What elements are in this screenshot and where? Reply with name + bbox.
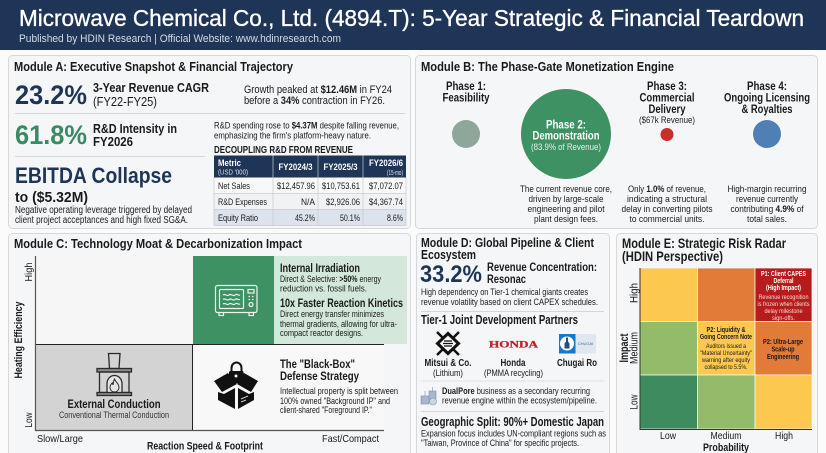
heading: Module E — [622, 235, 786, 264]
table: decoupling R&D from revenue: $2,926.06 — [326, 197, 360, 208]
x axis labels — [37, 433, 379, 452]
phase 2: The current revenue core, — [520, 184, 612, 195]
stat: revenue CAGR: 23.2% — [15, 80, 87, 110]
risk: liquidity and going concern — [700, 327, 753, 371]
quadrant: black-box strategy: 100% owned "Background IP" and — [280, 396, 390, 406]
table: decoupling R&D from revenue — [214, 156, 406, 226]
text: R&D note — [214, 120, 399, 142]
phase 1: Feasibility — [442, 92, 490, 104]
risk: ultra-large scale-up: Scale-up — [772, 344, 795, 354]
quadrant: internal irradiation: thermal gradients, allowing for ultra- — [280, 319, 397, 329]
phase 2: driven by large-scale — [528, 194, 604, 205]
text: growth note: before a 34% contraction in FY26. — [244, 95, 385, 107]
phase 4: Ongoing Licensing — [724, 92, 810, 104]
panel: Module E — [616, 234, 818, 453]
phase 3: indicating a structural — [627, 194, 707, 205]
quadrant: internal irradiation: Direct energy transfer minimizes — [280, 309, 384, 319]
phase 3: ($67k Revenue) — [639, 115, 695, 126]
phase 2: Phase 2: — [546, 120, 586, 132]
table: decoupling R&D from revenue: Equity Ratio — [218, 213, 258, 224]
stat: revenue concentration: Resonac — [487, 274, 526, 286]
risk matrix — [640, 268, 812, 430]
y axis labels — [13, 262, 35, 428]
stat: EBITDA collapse: Negative operating leverage triggered by delayed — [15, 205, 192, 216]
table: decoupling R&D from revenue: (USD '000) — [218, 170, 248, 176]
impact axis labels: High — [628, 283, 640, 303]
risk: liquidity and going concern: Auditors issued a — [706, 343, 746, 350]
partner: Honda — [484, 340, 543, 379]
stat: revenue CAGR: 3-Year Revenue CAGR — [93, 80, 210, 95]
impact axis labels — [619, 283, 640, 410]
phase 2 — [520, 89, 612, 225]
x axis labels: Slow/Large — [37, 433, 83, 445]
panel: Module D — [416, 234, 610, 453]
geographic split: Geographic Split: 90%+ Domestic Japan — [421, 415, 604, 429]
risk: ultra-large scale-up: Engineering — [767, 352, 799, 361]
stat: revenue concentration: revenue volatility based on client CAPEX schedules. — [421, 297, 598, 308]
stat: R&D intensity: 61.8% — [15, 120, 87, 150]
phase 3 — [622, 81, 713, 225]
heading: Module B: Module B: The Phase-Gate Monetization Engine — [421, 59, 674, 74]
geographic split — [421, 415, 606, 449]
probability axis labels: Low — [660, 430, 676, 442]
risk: client CAPEX deferral: sign-offs. — [772, 315, 795, 322]
geographic split: Expansion focus includes UN-compliant regions such as — [421, 428, 606, 440]
table: decoupling R&D from revenue: 8.6% — [387, 213, 403, 224]
risk: client CAPEX deferral: Revenue recognition — [758, 294, 809, 301]
quadrant: internal irradiation: Direct & Selective: >50% energy — [280, 274, 381, 284]
text: R&D note: emphasizing the firm's platform-heavy nature. — [214, 130, 371, 142]
phase 2: plant design fees. — [534, 214, 598, 225]
risk: client CAPEX deferral: delay milestone — [764, 308, 803, 315]
table: decoupling R&D from revenue: $4,367.74 — [369, 197, 403, 208]
panel: Module C — [8, 234, 410, 453]
risk: liquidity and going concern: P2: Liquidity & — [706, 327, 746, 334]
heading: Module D — [421, 235, 595, 262]
probability axis labels — [660, 430, 793, 453]
risk: liquidity and going concern: "Material Uncertainty" — [700, 350, 753, 357]
partner: Honda: HONDA — [489, 340, 538, 350]
quadrant: external conduction: Conventional Thermal Conduction — [59, 410, 169, 420]
risk: ultra-large scale-up — [763, 337, 803, 361]
phase 4: revenue currently — [736, 194, 798, 205]
stat: EBITDA collapse: client project acceptances and high fixed SG&A. — [15, 215, 188, 226]
icon: lab equipment — [421, 387, 436, 405]
phase 2: Demonstration — [532, 130, 600, 142]
quadrant: internal irradiation: reduction vs. fossil fuels. — [280, 284, 367, 294]
quadrant: internal irradiation: Internal Irradiation — [280, 261, 360, 275]
phase 2: (83.9% of Revenue) — [531, 142, 601, 153]
table: decoupling R&D from revenue: R&D Expenses — [218, 197, 267, 208]
impact axis labels: Low — [628, 394, 640, 410]
stat: R&D intensity: R&D Intensity in — [93, 121, 177, 136]
stat: revenue concentration: Revenue Concentration: — [487, 262, 597, 274]
x axis labels: Reaction Speed & Footprint — [147, 440, 263, 452]
text: growth note — [244, 84, 392, 107]
stat: R&D intensity — [15, 120, 177, 150]
phase 2: engineering and pilot — [528, 204, 605, 215]
quadrant: internal irradiation — [193, 256, 407, 344]
table: decoupling R&D from revenue: $10,753.61 — [322, 181, 360, 192]
geographic split: "Taiwan, Province of China" for specific projects. — [421, 438, 579, 449]
probability axis labels: Medium — [710, 430, 742, 442]
table: decoupling R&D from revenue: Metric — [218, 158, 241, 168]
note: DualPore: revenue engine within the ecosystem/pipeline. — [442, 396, 597, 406]
panel: Module A — [8, 56, 410, 228]
icon: Mitsui mark — [437, 332, 459, 355]
risk: liquidity and going concern: Going Concern Note — [700, 334, 752, 341]
y axis labels: Heating Efficiency — [13, 301, 25, 378]
phase 4: contributing 4.9% of — [730, 204, 804, 215]
quadrant: black-box strategy — [214, 357, 398, 415]
x axis labels: Fast/Compact — [322, 433, 379, 445]
phase 3: delay in converting pilots — [622, 204, 713, 215]
table: decoupling R&D from revenue: FY2025/3 — [324, 162, 358, 172]
table: decoupling R&D from revenue: $7,072.07 — [369, 181, 403, 192]
risk: client CAPEX deferral: Deferral — [774, 278, 794, 285]
icon: locked box — [214, 362, 258, 409]
stat: revenue concentration: High dependency on Tier-1 chemical giants creates — [421, 287, 588, 298]
table: decoupling R&D from revenue: FY2024/3 — [278, 162, 312, 172]
icon: fireplace — [97, 354, 132, 396]
text: R&D note: R&D spending rose to $4.37M despite falling revenue, — [214, 120, 399, 132]
heading: Module D: Ecosystem — [421, 247, 476, 262]
quadrant: black-box strategy: client-shared "Foreground IP." — [280, 405, 372, 415]
quadrant: internal irradiation: compact reactor designs. — [280, 328, 363, 338]
phase 3: to commercial units. — [630, 214, 704, 225]
risk: liquidity and going concern: warning after equity — [701, 357, 751, 364]
table: decoupling R&D from revenue: (15-mo) — [387, 170, 403, 177]
phase 4 — [724, 81, 810, 225]
quadrant: external conduction: External Conduction — [68, 397, 160, 411]
y axis labels: High — [23, 262, 35, 282]
phase 4: & Royalties — [742, 104, 792, 116]
table: decoupling R&D from revenue: FY2026/6 — [369, 158, 403, 168]
risk: liquidity and going concern: collapsed to 5.5%. — [704, 364, 748, 371]
partner: Honda: (PMMA recycling) — [484, 368, 543, 379]
quadrant chart — [36, 256, 407, 430]
partner: Chugai Ro — [557, 334, 597, 369]
risk: client CAPEX deferral: P1: Client CAPES — [761, 271, 806, 278]
phase 4: High-margin recurring — [728, 184, 806, 195]
heading: Module E: (HDIN Perspective) — [622, 248, 723, 264]
risk: client CAPEX deferral — [758, 271, 810, 322]
note: DualPore: DualPore business as a secondary recurring — [442, 386, 590, 397]
table: decoupling R&D from revenue: 50.1% — [340, 213, 360, 224]
title: Microwave Chemical Co., Ltd. (4894.T): 5-Year Strategic & Financial Teardown — [19, 5, 804, 31]
subtitle: Published by HDIN Research | Official Website: www.hdinresearch.com — [19, 33, 341, 45]
phase 1: Phase 1: — [446, 81, 486, 93]
header banner — [0, 0, 826, 50]
risk: client CAPEX deferral: (High Impact) — [766, 285, 801, 292]
stat: revenue concentration: 33.2% — [420, 261, 482, 288]
risk: ultra-large scale-up: P2: Ultra-Large — [763, 337, 803, 346]
stat: revenue CAGR: (FY22-FY25) — [93, 94, 157, 109]
heading: Module E: Module E: Strategic Risk Radar — [622, 235, 786, 251]
phase 3: Only 1.0% of revenue, — [628, 184, 706, 195]
icon: Chugai logo: CHUGAI — [578, 341, 593, 346]
partners heading: Tier-1 Joint Development Partners — [421, 313, 578, 327]
quadrant: black-box strategy: The "Black-Box" — [280, 357, 355, 371]
phase 4: total sales. — [747, 214, 787, 225]
note: DualPore — [421, 386, 597, 406]
table: decoupling R&D from revenue: N/A — [301, 197, 316, 208]
table heading: DECOUPLING R&D FROM REVENUE — [214, 144, 353, 156]
text: growth note: Growth peaked at $12.46M in FY24 — [244, 84, 392, 96]
table: decoupling R&D from revenue: $12,457.96 — [277, 181, 315, 192]
phase 4: Phase 4: — [747, 81, 787, 93]
impact axis labels: Medium — [628, 332, 640, 364]
phase 3: Commercial — [640, 92, 694, 104]
risk: client CAPEX deferral: is frozen when clients — [758, 301, 810, 308]
heading: Module D: Module D: Global Pipeline & Client — [421, 235, 595, 250]
partner: Mitsui: Mitsui & Co. — [424, 357, 472, 369]
partner: Honda: Honda — [500, 357, 526, 369]
partner: Mitsui: (Lithium) — [433, 368, 463, 379]
stat: EBITDA collapse — [15, 163, 192, 226]
stat: revenue CAGR — [15, 80, 210, 110]
quadrant: black-box strategy: Defense Strategy — [280, 369, 359, 383]
phase 3: Delivery — [648, 104, 686, 116]
phase 3: Phase 3: — [647, 81, 687, 93]
partner: Chugai Ro: Chugai Ro — [557, 357, 597, 369]
stat: EBITDA collapse: to ($5.32M) — [15, 190, 88, 206]
probability axis labels: High — [775, 430, 793, 442]
stat: revenue concentration — [420, 261, 598, 308]
impact axis labels: Impact — [619, 333, 631, 362]
quadrant: internal irradiation: 10x Faster Reaction Kinetics — [280, 296, 403, 310]
phase 1 — [442, 81, 490, 148]
quadrant: external conduction — [36, 345, 192, 430]
quadrant: black-box strategy: Intellectual property is split between — [280, 386, 398, 396]
heading: Module A: Module A: Executive Snapshot & Financial Trajectory — [14, 59, 294, 74]
heading: Module C: Module C: Technology Moat & Decarbonization Impact — [14, 236, 303, 251]
stat: EBITDA collapse: EBITDA Collapse — [15, 163, 172, 188]
stat: R&D intensity: FY2026 — [93, 134, 133, 149]
y axis labels: Low — [23, 412, 35, 428]
partner: Mitsui — [424, 332, 472, 379]
table: decoupling R&D from revenue: 45.2% — [295, 213, 315, 224]
icon: microwave — [216, 286, 257, 316]
table: decoupling R&D from revenue: Net Sales — [218, 181, 250, 192]
panel: Module B — [416, 56, 818, 228]
